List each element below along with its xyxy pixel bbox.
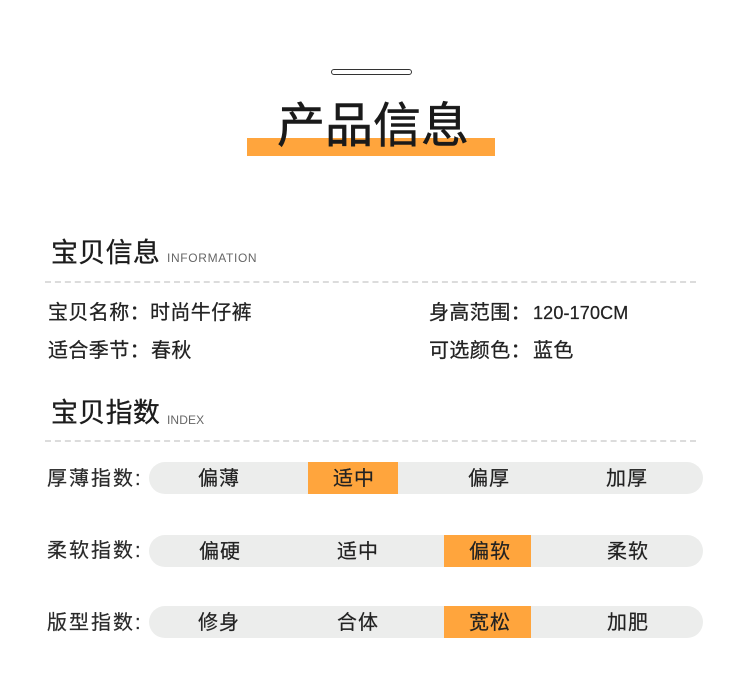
label: fit index: 版型指数: — [47, 612, 143, 634]
selected marker: medium — [308, 462, 398, 494]
option: slim: 修身 — [198, 612, 240, 634]
option: slightly soft: 偏软 — [469, 540, 511, 562]
option: loose: 宽松 — [469, 612, 511, 634]
heading: product index: 宝贝指数 — [51, 398, 160, 428]
selected marker: loose — [444, 606, 531, 638]
heading english: index: INDEX — [167, 413, 204, 427]
decorative pill above title — [331, 69, 412, 75]
option: soft: 柔软 — [607, 540, 649, 562]
info: season: 适合季节：春秋 — [48, 340, 192, 362]
heading english: information: INFORMATION — [167, 251, 257, 265]
title highlight bar — [247, 138, 495, 156]
info: product name: 宝贝名称：时尚牛仔裤 — [48, 302, 252, 324]
info: height range: 身高范围：120-170CM — [429, 302, 628, 324]
option: thick-leaning: 偏厚 — [468, 468, 510, 490]
info: colour: 可选颜色：蓝色 — [429, 340, 574, 362]
title: 产品信息 — [277, 100, 469, 153]
option: medium: 适中 — [333, 468, 375, 490]
option: roomy: 加肥 — [607, 612, 649, 634]
option: slightly hard: 偏硬 — [199, 540, 241, 562]
option: thin: 偏薄 — [198, 468, 240, 490]
scale: thickness — [149, 462, 703, 494]
scale: softness — [149, 534, 703, 566]
heading: product info: 宝贝信息 — [51, 238, 160, 268]
label: thickness index: 厚薄指数: — [47, 468, 143, 490]
label: softness index: 柔软指数: — [47, 540, 143, 562]
option: extra thick: 加厚 — [606, 468, 648, 490]
option: regular: 合体 — [337, 612, 379, 634]
selected marker: slightly soft — [444, 534, 531, 566]
scale: fit — [149, 606, 703, 638]
option: medium: 适中 — [337, 540, 379, 562]
